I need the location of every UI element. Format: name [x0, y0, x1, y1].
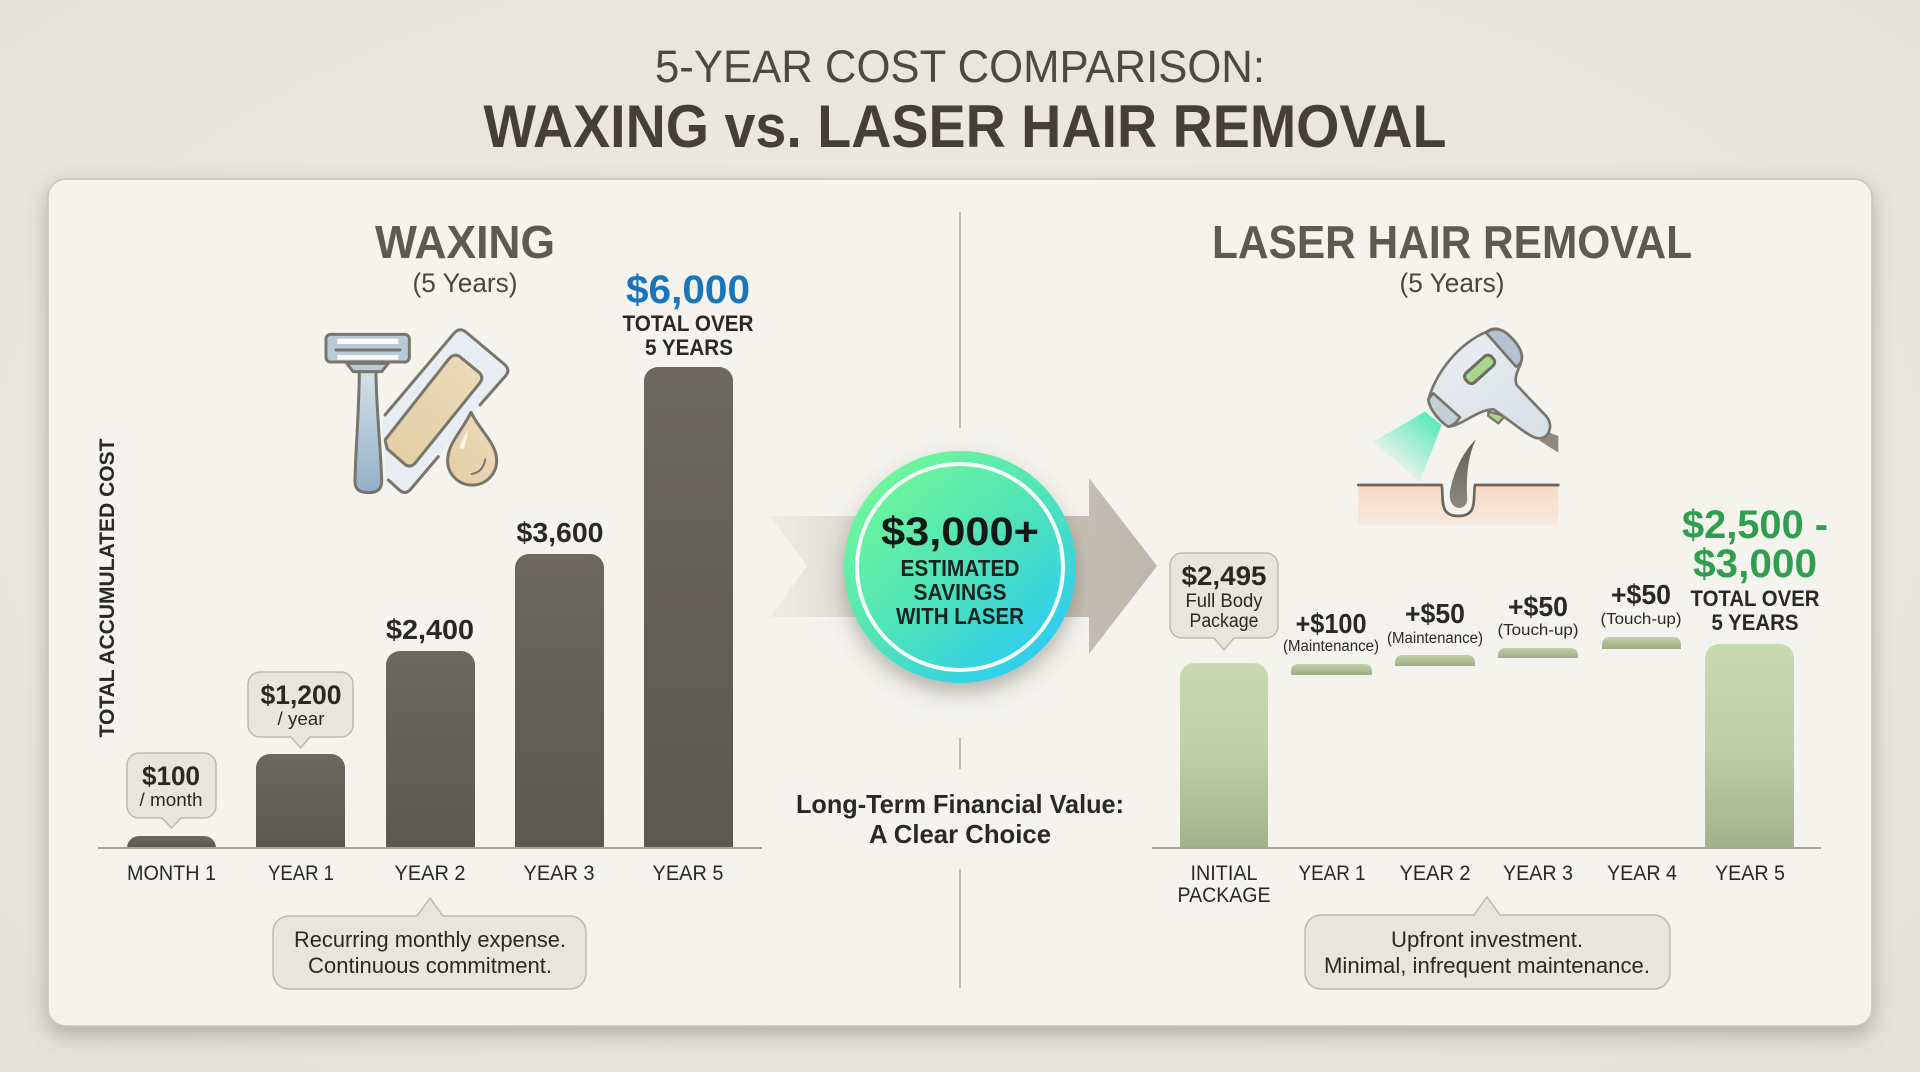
segment: year 3: [1498, 648, 1578, 658]
value: +$50 maintenance: +$50: [1405, 598, 1465, 629]
callout: recurring expense: Recurring monthly expense.: [294, 927, 566, 952]
callout: $2,495 package: Package: [1190, 611, 1258, 632]
text: long-term value: [796, 789, 1124, 849]
axis labels: waxing: YEAR 3: [524, 862, 594, 885]
heading: waxing: (5 Years): [412, 268, 518, 298]
value: +$50 touch-up year 4: (Touch-up): [1600, 611, 1682, 628]
icon: razor, wax strip and drop: [326, 329, 508, 493]
axis labels: waxing: YEAR 1: [268, 862, 334, 885]
callout: upfront investment: Upfront investment.: [1391, 927, 1583, 952]
callout: $2,495 package: $2,495: [1182, 561, 1266, 591]
axis labels: laser: YEAR 4: [1607, 862, 1677, 885]
value: +$50 maintenance: (Maintenance): [1387, 630, 1483, 647]
center divider: [959, 212, 961, 988]
axis line: [1152, 847, 1821, 849]
badge: estimated savings: WITH LASER: [896, 603, 1024, 629]
heading: laser: LASER HAIR REMOVAL: [1212, 216, 1692, 268]
bar: year 1: [256, 754, 345, 848]
heading: laser: [1212, 216, 1692, 298]
axis labels: waxing: YEAR 2: [394, 862, 466, 885]
value: $6,000 total: $6,000: [626, 268, 750, 312]
value: +$50 touch-up year 3: +$50: [1508, 591, 1568, 622]
value: $6,000 total: TOTAL OVER: [622, 311, 754, 336]
callout: $1,200 per year: [248, 672, 353, 748]
text: long-term value: A Clear Choice: [869, 819, 1051, 849]
callout: $100 per month: [127, 753, 216, 828]
value: +$100 maintenance: [1283, 608, 1379, 655]
bar: year 3: [515, 554, 604, 848]
callout: $1,200 per year: / year: [278, 709, 324, 729]
axis labels: laser: PACKAGE: [1178, 884, 1270, 907]
title: [484, 41, 1446, 160]
bar: initial package: [1180, 663, 1268, 848]
axis labels: laser: YEAR 1: [1298, 862, 1366, 885]
axis labels: waxing: MONTH 1: [127, 862, 216, 885]
bar: year 2: [386, 651, 475, 848]
heading: waxing: [375, 216, 555, 298]
segment: year 4: [1602, 637, 1681, 649]
heading: waxing: WAXING: [375, 216, 555, 268]
bar: month 1: [127, 836, 216, 848]
segment: year 2: [1395, 655, 1475, 666]
bar: year 5: [644, 367, 733, 848]
badge: estimated savings: ESTIMATED: [900, 555, 1020, 581]
panel: waxing: [96, 216, 762, 989]
panel: comparison card: [48, 179, 1872, 1026]
chart: laser bars: [1152, 637, 1821, 848]
value: $2,400: $2,400: [386, 614, 474, 645]
segment: year 1: [1291, 664, 1372, 675]
axis line: [98, 847, 762, 849]
panel: laser hair removal: [1152, 216, 1828, 989]
value: laser total: [1682, 503, 1828, 635]
axis labels: laser: YEAR 3: [1503, 862, 1573, 885]
value: +$100 maintenance: +$100: [1296, 608, 1366, 639]
axis labels: waxing: [127, 862, 724, 885]
callout: recurring expense: Continuous commitment.: [308, 953, 552, 978]
callout: recurring expense: [273, 898, 586, 989]
value: $6,000 total: [622, 268, 754, 360]
icon: laser device and hair follicle: [1358, 329, 1558, 525]
value: $3,600: $3,600: [516, 517, 604, 548]
text: long-term value: Long-Term Financial Value:: [796, 789, 1124, 819]
y axis label: TOTAL ACCUMULATED COST: [96, 438, 119, 738]
value: laser total: 5 YEARS: [1712, 610, 1798, 635]
value: +$100 maintenance: (Maintenance): [1283, 638, 1379, 655]
value: +$50 touch-up year 4: +$50: [1611, 579, 1671, 610]
axis labels: laser: YEAR 2: [1400, 862, 1470, 885]
value: laser total: TOTAL OVER: [1690, 586, 1820, 611]
axis labels: laser: [1178, 862, 1785, 907]
arrow: waxing to laser: [770, 478, 1157, 654]
bar: year 5: [1705, 644, 1794, 848]
axis labels: laser: INITIAL: [1190, 862, 1258, 885]
callout: upfront investment: Minimal, infrequent maintenance.: [1324, 953, 1650, 978]
callout: $100 per month: $100: [142, 761, 200, 791]
badge: estimated savings: SAVINGS: [914, 579, 1006, 605]
heading: laser: (5 Years): [1400, 268, 1504, 298]
value: +$50 touch-up year 4: [1600, 579, 1682, 628]
badge: estimated savings: $3,000+: [881, 510, 1039, 554]
value: +$50 touch-up year 3: (Touch-up): [1498, 622, 1578, 639]
value: +$50 maintenance: [1387, 598, 1483, 647]
title: WAXING vs. LASER HAIR REMOVAL: [484, 93, 1446, 160]
callout: $2,495 package: Full Body: [1186, 591, 1263, 612]
value: laser total: $2,500 -: [1682, 503, 1828, 547]
axis labels: waxing: YEAR 5: [652, 862, 724, 885]
callout: $2,495 package: [1170, 553, 1278, 650]
callout: upfront investment: [1305, 897, 1670, 989]
value: $6,000 total: 5 YEARS: [645, 335, 733, 360]
badge: estimated savings: [844, 451, 1076, 683]
chart: waxing bars: [98, 367, 762, 848]
title: 5-YEAR COST COMPARISON:: [655, 41, 1265, 92]
value: +$50 touch-up year 3: [1498, 591, 1578, 639]
callout: $100 per month: / month: [140, 790, 202, 810]
callout: $1,200 per year: $1,200: [260, 680, 342, 710]
axis labels: laser: YEAR 5: [1715, 862, 1785, 885]
value: laser total: $3,000: [1693, 542, 1817, 586]
